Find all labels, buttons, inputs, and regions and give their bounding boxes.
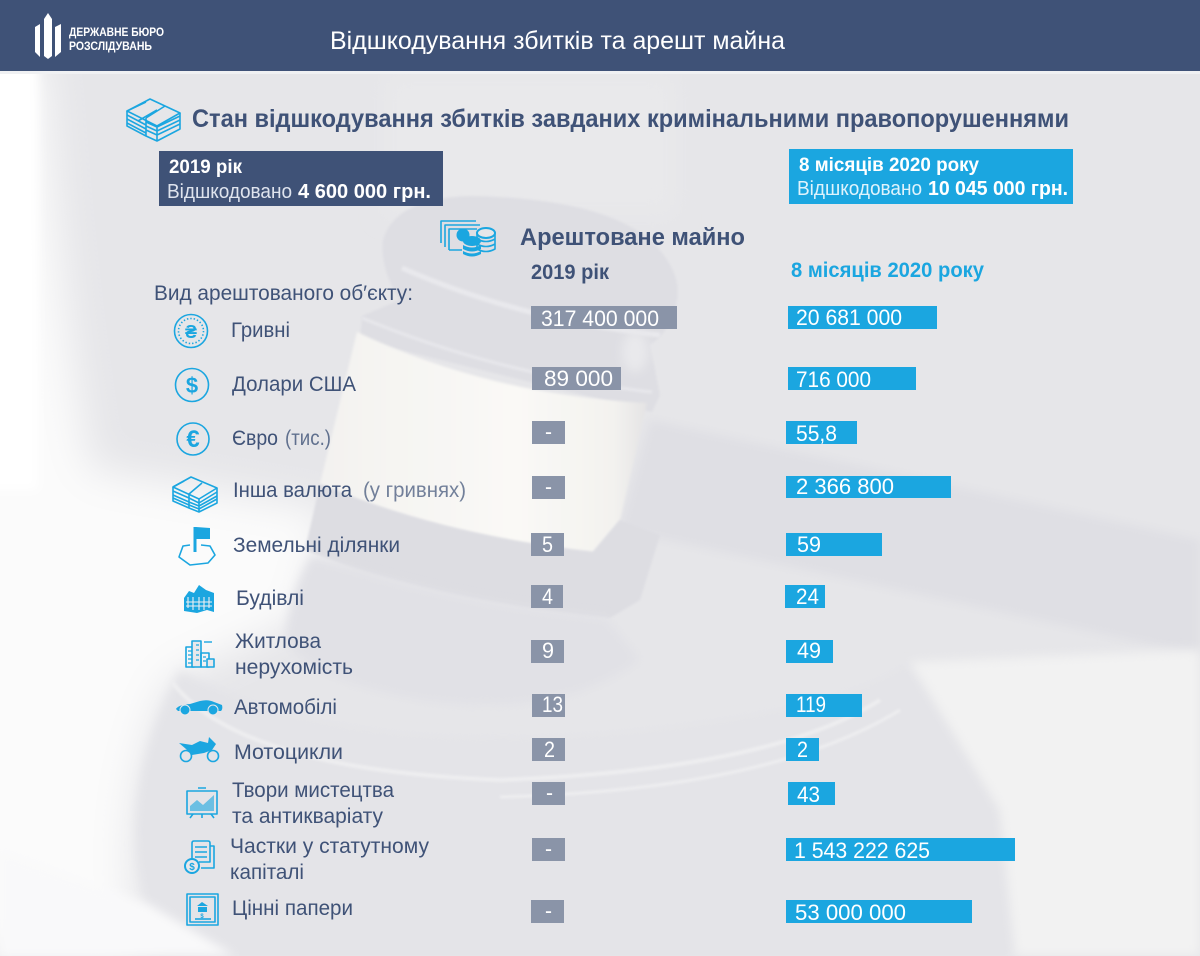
row: shares in capital [185,835,1015,884]
panel: 2020 compensation: Відшкодовано [797,178,922,200]
row: art and antiques: Твори мистецтва [232,779,394,802]
row: cars: Автомобілі [234,696,337,719]
row: cars: 119 [796,692,826,717]
icon: dollar coin: $ [186,373,198,398]
column heading 2020: 8 місяців 2020 року [791,259,984,282]
row: euro: (тис.) [285,427,331,450]
row: motorcycles: Мотоцикли [234,741,343,764]
row: US dollars: Долари США [232,373,356,396]
row: other currency: - [545,474,552,499]
row heading: Вид арештованого об′єкту: [154,282,413,305]
icon: car [176,700,222,715]
row: art and antiques: та антикваріату [232,805,383,828]
row: US dollars [176,366,916,402]
icon: euro coin: € [186,426,200,453]
heading: compensation: Стан відшкодування збитків завданих кримінальними правопорушеннями [192,105,1069,133]
row: art and antiques: - [546,780,553,805]
row: shares in capital: 1 543 222 625 [794,838,930,863]
logo: ДЕРЖАВНЕ БЮРО [69,27,164,39]
icon: building [184,585,214,613]
row: hryvnia: 20 681 000 [796,305,902,330]
icon: euro coin [177,423,209,455]
row: residential property: нерухомість [235,656,353,679]
icon: hryvnia coin [174,314,208,348]
row: residential property: Житлова [235,630,321,653]
icon: banknote stack [173,477,217,512]
row: other currency: (у гривнях) [363,479,466,502]
icon: cash and coins [441,221,495,256]
row: securities: 53 000 000 [795,900,906,925]
icon: land plot with flag [179,527,215,565]
row: hryvnia [174,305,937,348]
panel: 2020 compensation: 10 045 000 грн. [928,178,1068,200]
row: securities: - [545,898,552,923]
logo [35,13,164,59]
icon: security certificate [187,894,218,925]
row: securities [187,894,972,925]
row: buildings: 24 [796,584,819,609]
row: land plots: 59 [797,532,821,557]
row: cars [176,692,862,719]
row: securities: Цінні папери [232,897,353,920]
row: hryvnia: Гривні [231,319,290,342]
row: euro [177,419,857,455]
row: euro: - [545,419,552,444]
row: other currency: 2 366 800 [796,474,894,499]
header bar [0,0,1200,74]
icon: banknote stacks, heading [127,99,180,141]
panel: 2019 compensation [159,151,443,206]
row: land plots [179,527,882,565]
icon: documents with coin: $ [189,862,195,873]
row: other currency [173,474,951,512]
icon: hryvnia coin: ₴ [185,322,197,342]
row: land plots: Земельні ділянки [233,534,400,557]
row: motorcycles: 2 [544,737,555,762]
panel: 2020 compensation: 8 місяців 2020 року [799,155,979,176]
icon: dollar coin [176,368,208,402]
row: shares in capital: Частки у статутному [230,835,429,858]
row: motorcycles: 2 [797,737,808,762]
icon: security certificate: $ [200,914,204,920]
panel: 2019 compensation: 4 600 000 грн. [298,181,431,203]
row: shares in capital: - [545,836,552,861]
icon: city block [186,641,214,667]
row: buildings: Будівлі [236,587,304,610]
logo: РОЗСЛІДУВАНЬ [69,41,152,53]
row: US dollars: 89 000 [544,366,613,391]
panel: 2020 compensation [789,149,1073,204]
heading: seized property: Арештоване майно [520,224,745,251]
panel: 2019 compensation: 2019 рік [169,157,242,178]
page title: Відшкодування збитків та арешт майна [330,27,785,55]
row: buildings: 4 [542,584,553,609]
row: other currency: Інша валюта [233,479,352,502]
row: motorcycles [179,737,819,764]
row: euro: 55,8 [796,421,837,446]
icon: painting on easel [187,788,217,818]
row: hryvnia: 317 400 000 [541,306,659,331]
row: shares in capital: капіталі [230,861,304,884]
row: US dollars: 716 000 [796,367,871,392]
row: buildings [184,584,825,613]
column heading 2019: 2019 рік [531,261,609,284]
row: land plots: 5 [542,532,553,557]
row: residential property: 49 [797,638,821,663]
row: art and antiques: 43 [797,782,820,807]
row: residential property [186,630,833,679]
icon: documents with coin [185,841,214,873]
row: art and antiques [187,779,835,828]
panel: 2019 compensation: Відшкодовано [167,181,292,203]
row: residential property: 9 [542,638,554,663]
row: cars: 13 [542,692,563,717]
icon: motorcycle [179,737,218,762]
row: euro: Євро [232,427,278,450]
